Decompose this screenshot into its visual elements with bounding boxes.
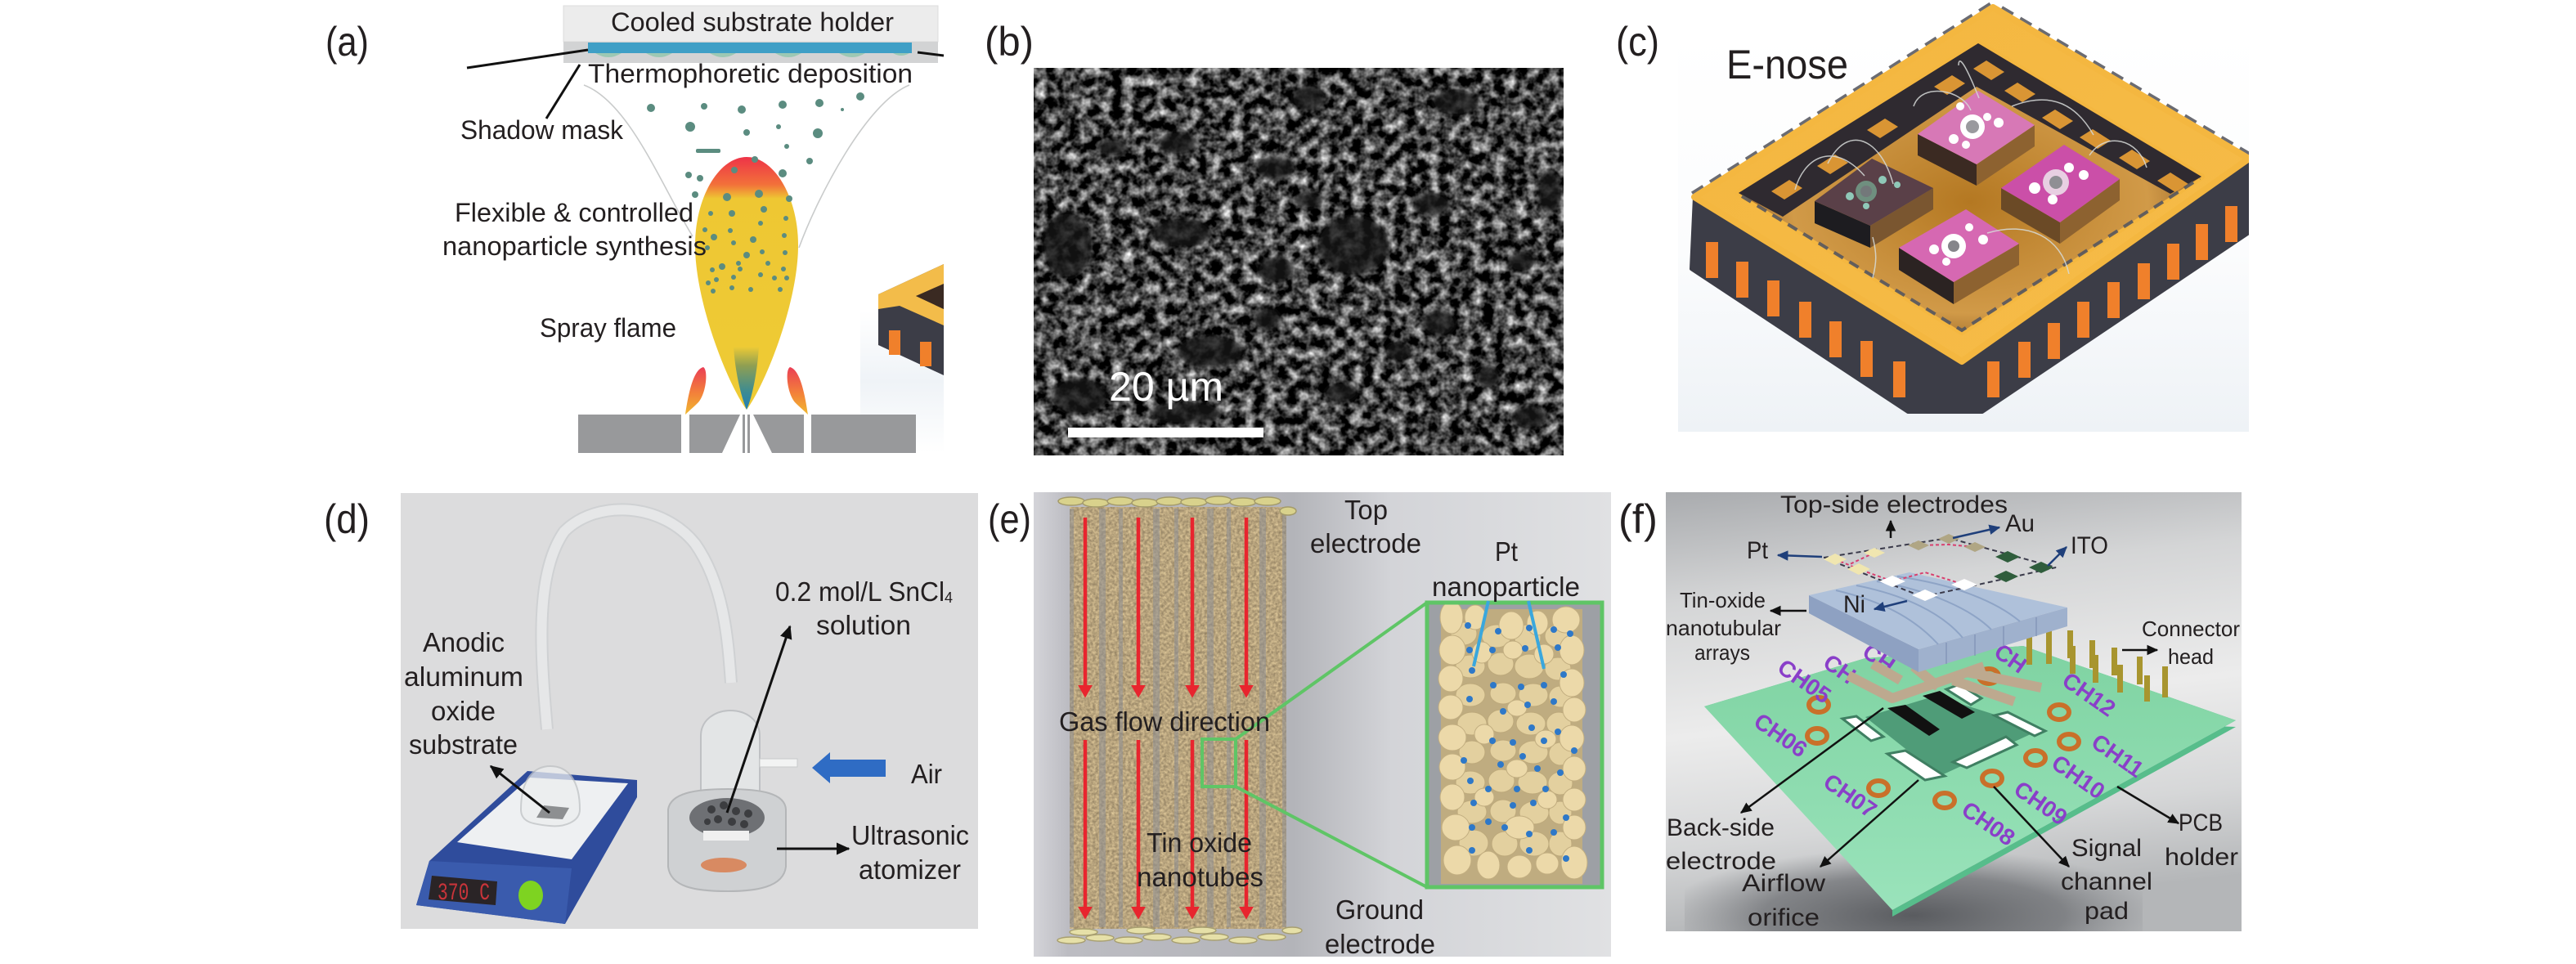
orifice area bbox=[1865, 696, 2041, 776]
label ITO: ITO bbox=[2071, 532, 2108, 559]
cooled substrate holder bbox=[563, 6, 938, 63]
label tin-oxide nanotubular arrays: arrays bbox=[1694, 640, 1750, 665]
sensor die: bottom bbox=[1899, 209, 2019, 304]
label spray flame: Spray flame bbox=[540, 313, 676, 343]
channel labels: CH bbox=[1858, 639, 1900, 679]
label E-nose: E-nose bbox=[1726, 42, 1848, 87]
sensor die: right bbox=[2001, 145, 2120, 244]
label flexible and controlled nanoparticle synthesis bbox=[442, 198, 707, 261]
spray flame bbox=[685, 157, 808, 415]
digital display: 370 C bbox=[438, 880, 490, 908]
label gas flow direction: Gas flow direction bbox=[1059, 706, 1270, 737]
channel labels: CH bbox=[1990, 639, 2031, 679]
label signal channel pad bbox=[2061, 835, 2152, 925]
panel a: spray flame synthesis bbox=[325, 6, 944, 453]
label flexible and controlled nanoparticle synthesis: Flexible & controlled bbox=[455, 198, 693, 227]
panel label d: (d) bbox=[324, 496, 370, 542]
label tin-oxide nanotubular arrays bbox=[1666, 588, 1781, 665]
label ultrasonic atomizer bbox=[851, 820, 969, 885]
atomizer flask and beaker bbox=[668, 711, 797, 891]
channel labels: CH10 bbox=[2047, 750, 2110, 804]
label connector head: Connector bbox=[2142, 617, 2240, 641]
digital display bbox=[429, 876, 497, 908]
label ultrasonic atomizer: Ultrasonic bbox=[851, 820, 969, 850]
E-nose package bbox=[1678, 7, 2249, 432]
chip corner from panel c bbox=[860, 264, 944, 417]
blue pointer lines to Pt nanoparticles bbox=[1474, 601, 1544, 669]
channel labels: CH bbox=[1819, 649, 1860, 689]
pointer arrows bbox=[491, 626, 849, 849]
label Pt nanoparticle bbox=[1432, 536, 1580, 602]
label signal channel pad: Signal bbox=[2071, 835, 2142, 862]
channel labels: CH08 bbox=[1957, 796, 2020, 850]
cooled substrate holder: Cooled substrate holder bbox=[611, 7, 894, 37]
label back-side electrode: Back-side bbox=[1667, 814, 1775, 841]
label Au: Au bbox=[2005, 510, 2035, 537]
label ultrasonic atomizer: atomizer bbox=[859, 854, 961, 885]
airflow slots bbox=[1842, 684, 2045, 780]
inset: magnified nanotube bbox=[1427, 601, 1602, 887]
label tin-oxide nanotubular arrays: Tin-oxide bbox=[1680, 588, 1766, 612]
dashed inner seam bbox=[1742, 178, 2200, 330]
label connector head: head bbox=[2168, 644, 2214, 669]
label SnCl4 solution bbox=[775, 576, 953, 640]
label anodic aluminum oxide substrate bbox=[404, 627, 523, 760]
label anodic aluminum oxide substrate: aluminum bbox=[404, 661, 523, 692]
bond wires bbox=[1795, 61, 2147, 278]
label SnCl4 solution: 0.2 mol/L SnCl bbox=[775, 576, 945, 607]
label ground electrode: electrode bbox=[1325, 929, 1435, 959]
label anodic aluminum oxide substrate: Anodic bbox=[423, 627, 505, 657]
label shadow mask: Shadow mask bbox=[460, 115, 624, 145]
label PCB holder: holder bbox=[2165, 844, 2238, 871]
top-side electrodes layer bbox=[1824, 534, 2056, 601]
orange pins bbox=[1706, 206, 2237, 397]
channel labels: CH05 bbox=[1773, 654, 1836, 708]
label back-side electrode bbox=[1666, 814, 1776, 875]
ground electrode bbox=[1057, 927, 1302, 944]
channel labels: CH11 bbox=[2087, 729, 2148, 782]
glass tube bbox=[541, 509, 731, 729]
nanoparticles bbox=[647, 92, 864, 294]
label PCB holder bbox=[2165, 809, 2238, 871]
panel label a: (a) bbox=[325, 19, 369, 65]
panel b: SEM image bbox=[985, 19, 1564, 455]
glass dome and substrate bbox=[521, 766, 580, 826]
signal pads bbox=[1807, 669, 2079, 808]
label SnCl4 solution: 4 bbox=[945, 590, 953, 606]
label PCB holder: PCB bbox=[2179, 809, 2223, 836]
top electrode bbox=[1058, 496, 1296, 515]
label Pt nanoparticle: Pt bbox=[1495, 536, 1518, 567]
label tin oxide nanotubes: Tin oxide bbox=[1147, 827, 1252, 858]
label top-side electrodes: Top-side electrodes bbox=[1780, 491, 2008, 518]
label Ni: Ni bbox=[1843, 591, 1865, 618]
gold frame bbox=[1694, 7, 2249, 361]
SEM micrograph texture bbox=[1034, 68, 1564, 455]
channel labels: CH09 bbox=[2009, 776, 2072, 830]
pointer arrows bbox=[1741, 521, 2179, 867]
label connector head bbox=[2142, 617, 2240, 669]
panel f background bbox=[1666, 492, 2242, 931]
channel labels: CH12 bbox=[2058, 667, 2120, 721]
panel e: nanotube array bbox=[988, 492, 1611, 959]
panel d: deposition apparatus bbox=[324, 493, 978, 929]
panel label e: (e) bbox=[988, 496, 1031, 542]
sensor die: top bbox=[1918, 91, 2035, 186]
label tin oxide nanotubes bbox=[1137, 827, 1263, 892]
label top electrode bbox=[1310, 495, 1421, 558]
label thermophoretic deposition: Thermophoretic deposition bbox=[588, 59, 913, 88]
label flexible and controlled nanoparticle synthesis: nanoparticle synthesis bbox=[442, 231, 707, 261]
zoom callout lines bbox=[1202, 603, 1427, 887]
label anodic aluminum oxide substrate: substrate bbox=[409, 729, 518, 760]
panel e background bbox=[1034, 492, 1611, 957]
label ground electrode: Ground bbox=[1335, 895, 1424, 925]
back-side electrode traces bbox=[1848, 664, 2041, 702]
label signal channel pad: channel bbox=[2061, 868, 2152, 895]
channel labels: CH07 bbox=[1819, 769, 1882, 823]
gas stream curves bbox=[584, 85, 909, 248]
panel d background bbox=[401, 493, 978, 929]
scalloped outer edge bbox=[1694, 7, 2249, 197]
label anodic aluminum oxide substrate: oxide bbox=[431, 696, 496, 726]
tin-oxide nanotubular block bbox=[1809, 572, 2067, 672]
label tin oxide nanotubes: nanotubes bbox=[1137, 862, 1263, 892]
red gas flow arrows bbox=[1085, 518, 1246, 916]
burner blocks bbox=[578, 415, 916, 453]
PCB holder bbox=[1704, 646, 2236, 917]
green knob bbox=[518, 881, 543, 910]
label back-side electrode: electrode bbox=[1666, 848, 1776, 875]
label airflow orifice: orifice bbox=[1748, 904, 1820, 931]
scale label: 20 µm bbox=[1109, 364, 1223, 410]
label top electrode: electrode bbox=[1310, 528, 1421, 558]
label air: Air bbox=[911, 759, 942, 789]
label airflow orifice: Airflow bbox=[1742, 870, 1825, 897]
label top electrode: Top bbox=[1344, 495, 1388, 525]
scale bar bbox=[1068, 428, 1263, 437]
panel label b: (b) bbox=[985, 19, 1034, 65]
cavity bbox=[1739, 43, 2201, 332]
air arrow bbox=[812, 752, 886, 783]
panel label f: (f) bbox=[1618, 496, 1658, 542]
sensor die: dark bbox=[1815, 159, 1933, 248]
label Pt nanoparticle: nanoparticle bbox=[1432, 572, 1580, 602]
connector pins bbox=[2026, 630, 2168, 702]
pointer lines to shadow mask bbox=[467, 50, 944, 119]
label signal channel pad: pad bbox=[2085, 898, 2129, 925]
label Pt: Pt bbox=[1747, 537, 1769, 564]
black back-side bars bbox=[1887, 691, 1975, 736]
panel label c: (c) bbox=[1616, 19, 1659, 65]
channel labels: CH06 bbox=[1749, 708, 1812, 762]
blue pointer arrows bbox=[1778, 527, 2067, 609]
label ground electrode bbox=[1325, 895, 1435, 959]
panel c: E-nose chip bbox=[1616, 7, 2249, 432]
label airflow orifice bbox=[1742, 870, 1825, 931]
hot plate bbox=[416, 771, 637, 924]
channel labels bbox=[1749, 639, 2148, 850]
bond pads bbox=[1771, 61, 2188, 200]
tube array bbox=[1070, 507, 1286, 929]
label tin-oxide nanotubular arrays: nanotubular bbox=[1666, 616, 1781, 640]
panel f: exploded sensor device bbox=[1618, 491, 2242, 931]
label SnCl4 solution: solution bbox=[816, 610, 911, 640]
